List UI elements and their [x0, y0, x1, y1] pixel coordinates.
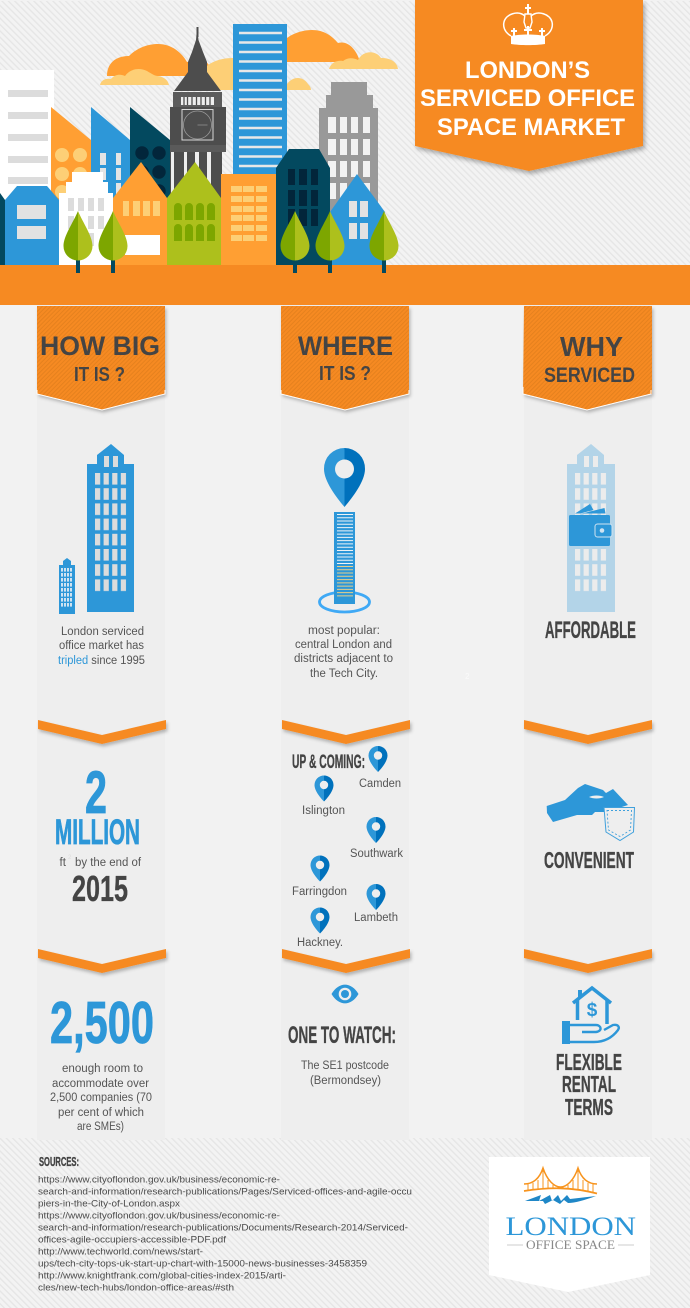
row of slanted buildings	[51, 107, 170, 205]
stat: 2,500 companies: accommodate over	[52, 1078, 149, 1090]
heading banner: where	[281, 306, 409, 410]
heading banner: why serviced: SERVICED	[544, 364, 635, 387]
icon: house in hand	[562, 988, 619, 1044]
text: tripled since 1995	[58, 626, 145, 667]
label: flexible rental terms: RENTAL	[562, 1071, 616, 1097]
stat: 2,500 companies: 2,500	[50, 990, 154, 1056]
label: flexible rental terms	[556, 1049, 622, 1120]
trees	[64, 211, 398, 273]
arrow chevron	[282, 720, 410, 744]
stat: 2 million: ft	[60, 857, 67, 869]
title text: LONDON’S	[465, 57, 590, 84]
orange ground band	[0, 265, 690, 305]
arrow chevron	[38, 720, 166, 744]
pin: Farringdon	[310, 856, 330, 882]
label: Camden: Camden	[359, 778, 401, 790]
illustration: London skyline	[0, 24, 690, 305]
sources list	[38, 1154, 412, 1294]
stat: 2,500 companies: are SMEs)	[77, 1121, 124, 1133]
grey stepped tower	[319, 82, 378, 240]
icon: wallet over building	[567, 444, 615, 612]
wordmark: LONDON	[506, 1212, 636, 1241]
text: tripled since 1995: office market has	[59, 640, 144, 652]
sources list: search-and-information/research-publications/Pages/Serviced-offices-and-agile-occu	[38, 1186, 412, 1198]
panel: how big it is	[37, 305, 166, 1140]
label: Islington: Islington	[302, 805, 345, 817]
text: one to watch: (Bermondsey)	[310, 1075, 381, 1087]
label: flexible rental terms: TERMS	[565, 1094, 613, 1120]
heading banner: how big: IT IS ?	[74, 364, 125, 386]
stat: 2,500 companies	[50, 990, 154, 1133]
clouds	[100, 30, 398, 90]
stat: 2 million: 2	[68, 855, 72, 861]
text: tripled since 1995: London serviced	[61, 626, 144, 638]
heading banner: how big: HOW BIG	[40, 331, 160, 361]
icon: bridge	[524, 1168, 597, 1204]
label: Hackney: Hackney.	[297, 937, 343, 949]
Big Ben tower	[170, 27, 226, 212]
text: one to watch: The SE1 postcode	[301, 1060, 389, 1072]
icon: eye	[332, 985, 358, 1003]
text: one to watch	[288, 1022, 396, 1087]
heading banner: why serviced: WHY	[560, 331, 623, 362]
panel: why serviced	[523, 305, 652, 1140]
title text: SERVICED OFFICE	[420, 85, 635, 112]
sources list: http://www.knightfrank.com/global-cities-index-2015/arti-	[38, 1270, 286, 1282]
icon: crown	[504, 4, 552, 45]
pin: Hackney	[310, 908, 330, 934]
sources list: https://www.cityoflondon.gov.uk/business/economic-re-	[38, 1210, 280, 1222]
blue tower	[233, 24, 287, 179]
heading banner: where: WHERE	[298, 331, 393, 361]
front row houses	[0, 149, 385, 265]
icon: hand and pocket	[547, 784, 634, 840]
arrow chevron	[524, 720, 652, 744]
title banner	[415, 0, 643, 171]
sources list: search-and-information/research-publications/Documents/Research-2014/Serviced-	[38, 1222, 408, 1234]
panel: where it is	[281, 305, 410, 1140]
sources list: SOURCES:	[39, 1154, 79, 1169]
sources list: cles/new-tech-hubs/london-office-areas/#sth	[38, 1282, 234, 1294]
sources list: https://www.cityoflondon.gov.uk/business/economic-re-	[38, 1174, 280, 1186]
pin: Southwark	[366, 817, 386, 843]
text: one to watch: ONE TO WATCH:	[288, 1022, 396, 1049]
label: Southwark: Southwark	[350, 848, 403, 860]
stat: 2,500 companies: 2,500 companies (70	[50, 1092, 152, 1104]
white office building	[0, 70, 54, 205]
icon: small and large buildings	[59, 444, 134, 614]
stat: 2 million	[55, 759, 142, 909]
stat: 2 million: by the end of	[75, 857, 142, 869]
label: Farringdon: Farringdon	[292, 886, 347, 898]
map: up and coming districts: UP & COMING:	[292, 752, 365, 773]
label: flexible rental terms: FLEXIBLE	[556, 1049, 622, 1075]
pin: Lambeth	[366, 884, 386, 910]
stat: 2 million: 2	[85, 759, 107, 826]
arrow chevron	[282, 949, 410, 973]
wordmark	[506, 1212, 636, 1252]
faint stray digit: 2	[465, 672, 470, 681]
pin: Islington	[314, 776, 334, 802]
sources list: ups/tech-city-tops-uk-start-up-chart-with-15000-news-businesses-3458359	[38, 1258, 367, 1270]
text: most popular	[294, 625, 393, 680]
heading banner: where: IT IS ?	[319, 363, 371, 385]
stat: 2 million: MILLION	[55, 813, 140, 852]
stat: 2 million: 2015	[72, 868, 128, 909]
arrow chevron	[524, 949, 652, 973]
map: up and coming districts	[292, 746, 403, 949]
heading banner: how big	[37, 306, 165, 410]
icon: pin over tower	[320, 448, 370, 612]
heading banner: why serviced	[523, 306, 652, 410]
icon: house in hand: $	[587, 1000, 598, 1021]
wordmark: OFFICE SPACE	[526, 1238, 615, 1252]
pin: Camden	[368, 746, 388, 772]
stat: 2,500 companies: enough room to	[62, 1063, 143, 1075]
text: most popular: most popular:	[308, 625, 380, 637]
stat: 2,500 companies: per cent of which	[58, 1107, 144, 1119]
sources list: piers-in-the-City-of-London.aspx	[38, 1198, 180, 1210]
sources list: offices-agile-occupiers-accessible-PDF.pdf	[38, 1234, 226, 1246]
text: most popular: districts adjacent to	[294, 653, 393, 665]
label: Lambeth: Lambeth	[354, 912, 398, 924]
logo: London Office Space	[489, 1157, 650, 1292]
title text	[420, 57, 635, 141]
text: most popular: the Tech City.	[310, 668, 378, 680]
text: tripled since 1995: tripled since 1995	[58, 655, 145, 667]
arrow chevron	[38, 949, 166, 973]
title text: SPACE MARKET	[437, 114, 625, 141]
text: most popular: central London and	[295, 639, 392, 651]
sources list: http://www.techworld.com/news/start-	[38, 1246, 203, 1258]
